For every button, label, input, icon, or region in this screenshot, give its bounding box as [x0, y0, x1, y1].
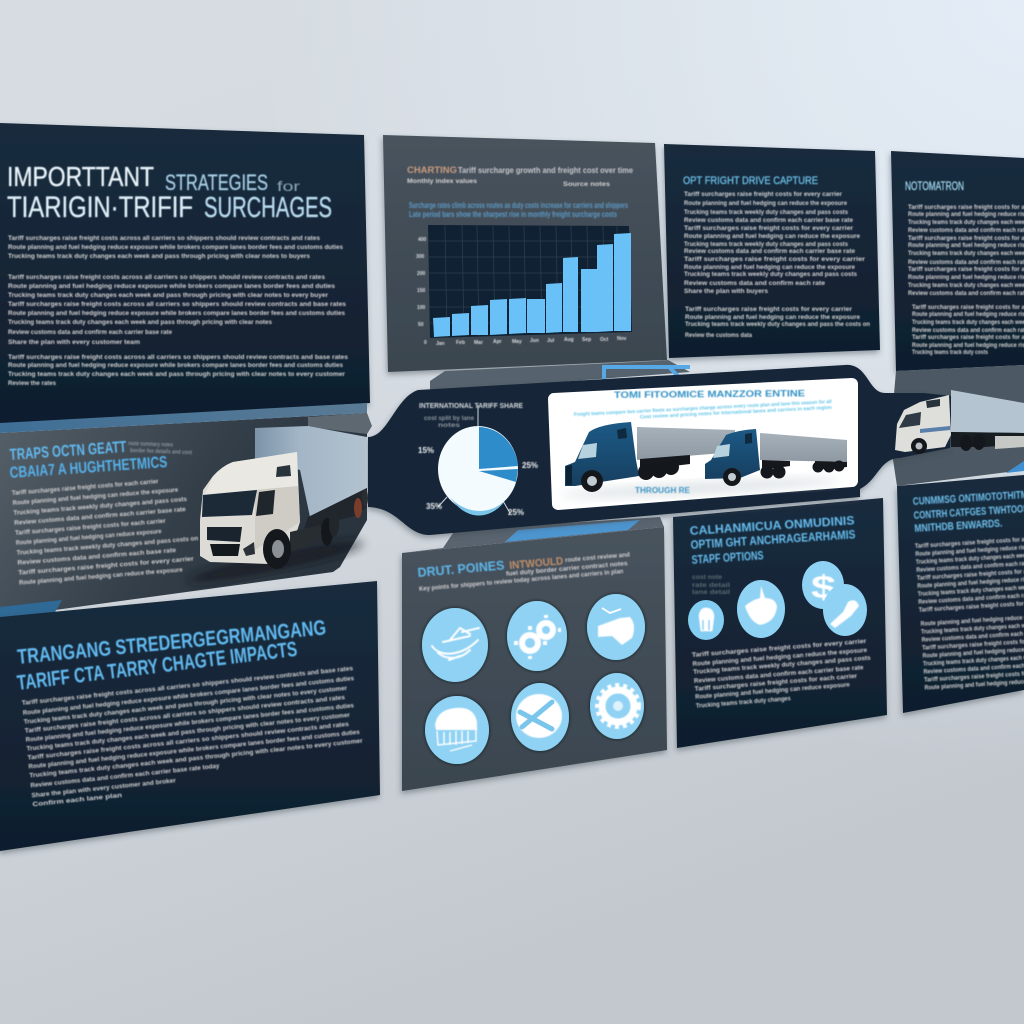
icon card heading: Key points for shippers to review today across lanes and carriers in plan [419, 568, 624, 593]
strip body text: Route planning and fuel hedging can reduce the exposure [12, 487, 179, 507]
strip body text: Review customs data and confirm each base rate [17, 547, 177, 567]
strategies body text: Trucking teams track duty changes each week and pass through pricing with clear notes to every customer [29, 738, 363, 780]
card heading [689, 513, 857, 567]
chart heading text: Surcharge rates climb across routes as duty costs increase for carriers and shippers [409, 201, 628, 210]
card heading [912, 489, 1024, 535]
trailer [255, 426, 367, 517]
panel: top right text card [891, 151, 1024, 371]
text block: overview paragraphs [8, 235, 348, 387]
strip heading: TRAPS OCTN GEATT [9, 439, 127, 464]
icon: container dome [425, 696, 489, 764]
card body text: Route planning and fuel hedging can reduce the exposure [684, 264, 855, 271]
gray connector strips [402, 360, 1024, 553]
rear wheels [321, 489, 368, 546]
pie labels: 35% [426, 502, 442, 511]
card body text: Route planning and fuel hedging can reduce exposure [695, 681, 850, 701]
card body text: Review customs data and confirm each carrier base rate [694, 664, 864, 685]
windshield [202, 490, 257, 517]
card body text: Trucking teams track weekly duty changes and pass costs [684, 271, 857, 278]
icon: handshake [587, 594, 645, 660]
front wheel [263, 529, 291, 569]
trailer side plate [995, 436, 1024, 449]
heading: important strategies: TIARIGIN·TRIFIF [7, 191, 193, 224]
strip body text: Review customs data and confirm each carrier base rate [14, 506, 186, 527]
strategies heading: TARIFF CTA TARRY CHAGTE IMPACTS [16, 638, 299, 695]
central connector band [368, 365, 952, 535]
small note [692, 575, 730, 596]
strategies body text [21, 665, 367, 808]
sleeper window [276, 465, 291, 477]
strategies body text: Tariff surcharges raise freight costs across all carriers so shippers should review contracts and rates [24, 694, 346, 735]
cab side [255, 486, 300, 550]
card body text: Review the customs data [685, 332, 752, 339]
bar chart: Nov [617, 336, 627, 342]
icon card heading: DRUT. POINES [417, 557, 505, 580]
right trailer chassis [951, 432, 1024, 447]
card body text: Review customs data and confirm each rate [684, 280, 825, 287]
bumper grille [210, 544, 240, 556]
strategies body text: Confirm each lane plan [32, 792, 122, 808]
pie leader lines [438, 405, 510, 513]
heading: important strategies: for [277, 178, 300, 194]
icon: crossing tools [511, 683, 569, 751]
blue accent on lower strip [505, 520, 640, 542]
bar chart: May [512, 339, 522, 345]
text block: overview paragraphs: Review the rates [8, 380, 56, 387]
icon: large gear [590, 673, 644, 739]
pie labels: 25% [508, 508, 524, 517]
bar chart: 0 [424, 340, 427, 346]
bar chart: 300 [416, 254, 425, 260]
card body text [684, 191, 870, 339]
strip body text [12, 475, 201, 587]
card body text: Route planning and fuel hedging can reduce the exposure [684, 233, 860, 240]
chassis [290, 525, 322, 552]
heading: important strategies [7, 161, 332, 224]
chart heading text: Monthly index values [407, 178, 477, 185]
card body text: Route planning and fuel hedging can reduce the exposure [685, 314, 860, 321]
headlight [243, 542, 255, 556]
text block: overview paragraphs: Share the plan with every customer team [8, 339, 140, 346]
right blue stripe [920, 426, 950, 433]
bar chart: Apr [493, 339, 502, 345]
card body text [692, 638, 874, 710]
card heading: NOTOMATRON [905, 179, 964, 193]
chart heading text: Late period bars show the sharpest rise in monthly freight surcharge costs [409, 210, 617, 219]
icon: hand [737, 580, 785, 638]
bar chart: Jul [547, 338, 555, 344]
chart heading text: Tariff surcharge growth and freight cost over time [458, 166, 634, 175]
bar chart: Jan [436, 341, 445, 347]
icon: dollar [802, 561, 844, 609]
small note: rate detail [692, 583, 730, 589]
icon card heading: route cost review and [565, 551, 630, 564]
icon card heading: INTWOULD [509, 555, 564, 572]
strip body text: Trucking teams track weekly duty changes and pass costs on [16, 535, 198, 557]
panel: icon grid card [402, 527, 667, 791]
panel: bottom right text card [897, 475, 1024, 713]
right cab [895, 395, 951, 452]
strategies body text: Trucking teams track duty changes each week and pass through pricing with clear notes to every customer [26, 712, 351, 753]
roof fairing [205, 452, 298, 494]
strip heading: CBAIA7 A HUGHTHETMICS [9, 454, 168, 482]
strip body text: Trucking teams track weekly duty changes and pass costs [13, 496, 188, 517]
heading: important strategies: STRATEGIES [165, 170, 268, 195]
strip heading: route summary notes [128, 441, 174, 449]
icon: warehouse cup [688, 600, 724, 640]
icon: dollar: $ [811, 569, 836, 605]
card body text: Tariff surcharges raise freight costs for every carrier [692, 638, 867, 659]
first blue truck [565, 422, 735, 492]
card body text: Tariff surcharges raise freight costs for each carrier [694, 673, 858, 693]
illustration: two blue trucks [560, 422, 847, 501]
card heading: STAPF OPTIONS [691, 548, 764, 567]
pie chart [438, 426, 518, 516]
card body text: Route planning and fuel hedging can reduce the exposure [684, 200, 847, 207]
card body text: Route planning and fuel hedging can reduce the exposure [692, 647, 868, 668]
bar chart: Aug [564, 337, 574, 343]
card body text: Trucking teams track weekly duty changes and pass costs [684, 209, 848, 216]
card sub text: Freight teams compare two carrier fleets as surcharges change across every route plan and lane this season for all [574, 399, 832, 418]
bar chart: 50 [418, 322, 424, 328]
strategies body text: Share the plan with every customer and broker [31, 777, 177, 799]
pie title: notes [438, 423, 461, 429]
truck shadow [560, 475, 840, 501]
card sub text: Cost review and pricing notes for international lanes and carriers in each region [640, 405, 832, 420]
card body text: Tariff surcharges raise freight costs for every carrier [684, 191, 842, 198]
text block: overview paragraphs: Trucking teams track duty changes each week and pass through pricing with clear notes [8, 319, 272, 326]
text block: overview paragraphs: Trucking teams track duty changes each week and pass through pricing with clear notes to every buyer [8, 292, 328, 299]
chart heading text: Source notes [563, 181, 610, 188]
card body text: Trucking teams track weekly duty changes and pass costs [684, 241, 848, 248]
card heading: OPT FRIGHT DRIVE CAPTURE [683, 175, 818, 187]
card body text: Trucking teams track weekly duty changes and pass the costs on [685, 321, 870, 328]
card body text: Share the plan with buyers [684, 288, 768, 295]
strategies body text: Route planning and fuel hedging reduce exposure while brokers compare lanes border fees and customs duties [25, 702, 355, 744]
card body text [908, 204, 1024, 356]
strip body text: Tariff surcharges raise freight costs for every carrier [18, 556, 195, 577]
pie labels: 25% [522, 461, 538, 470]
bar chart: Feb [456, 340, 465, 346]
blue accent on right strip [1006, 461, 1024, 473]
pie title [419, 403, 523, 429]
card body text: Tariff surcharges raise freight costs for every carrier [684, 256, 866, 263]
strip body text: Tariff surcharges raise freight costs for each carrier [12, 478, 159, 497]
right side window [926, 399, 940, 408]
heading: important strategies: SURCHAGES [204, 192, 332, 224]
bar chart: Sep [582, 337, 591, 343]
panel: bar chart card [383, 135, 667, 372]
cab body [200, 452, 300, 564]
road shadow [185, 535, 365, 589]
right trailer [951, 390, 1024, 433]
card caption: THROUGH RE [635, 486, 691, 495]
panel: main title and overview [0, 123, 370, 424]
text block: overview paragraphs: Trucking teams track duty changes each week and pass through pricing with clear notes to buyers [8, 253, 310, 260]
chart heading text [407, 165, 634, 219]
strip heading: border fee details and cost [130, 448, 192, 456]
illustration: right white truck [895, 390, 1024, 454]
text block: overview paragraphs: Trucking teams track duty changes each week and pass through pricing with clear notes to every customer [8, 371, 345, 378]
card body text [915, 536, 1024, 692]
strategies body text: Route planning and fuel hedging reduce exposure while brokers compare lanes border fees and customs duties [28, 729, 360, 771]
strategies body text: Trucking teams track duty changes each week and pass through pricing with clear notes to every customer [23, 685, 348, 726]
text block: overview paragraphs: Route planning and fuel hedging reduce exposure while brokers compare lanes border fees and duties [8, 283, 335, 290]
white truck card [554, 384, 852, 504]
strip heading [9, 439, 192, 482]
bar chart [416, 225, 632, 347]
icon: ship [422, 608, 488, 682]
strategies body text: Tariff surcharges raise freight costs across all carriers so shippers should review contracts and rates [27, 721, 350, 762]
panel: bottom left strategies [0, 581, 380, 851]
icon: arm [823, 584, 867, 636]
heading: important strategies: IMPORTTANT [7, 161, 154, 192]
strategies body text: Route planning and fuel hedging reduce exposure while brokers compare lanes border fees and customs duties [23, 675, 355, 717]
strip body text: Route planning and fuel hedging can reduce exposure [16, 528, 162, 547]
small note: lane detail [692, 590, 730, 596]
pie labels: 15% [418, 446, 434, 455]
card body text: Trucking teams track duty costs [912, 349, 988, 356]
pie title: cost split by lane [424, 416, 475, 422]
illustration: left white truck [185, 426, 368, 589]
trailer underside [300, 488, 367, 540]
bar chart: Mar [474, 340, 483, 346]
text block: overview paragraphs: Tariff surcharges raise freight costs across all carriers so shippers should review contracts and base rates [8, 301, 346, 308]
bar chart: 100 [417, 305, 426, 311]
strip body text: Route planning and fuel hedging can reduce the exposure [19, 567, 183, 587]
pie labels [418, 446, 538, 517]
text block: overview paragraphs: Tariff surcharges raise freight costs across all carriers so shippers should review contracts and rates [8, 235, 320, 242]
right windshield [899, 412, 921, 428]
card body text: Tariff surcharges raise freight costs for every carrier [685, 306, 852, 313]
card heading: CALHANMICUA ONMUDINIS [689, 513, 855, 538]
card body text: Trucking teams track weekly duty changes and pass costs [693, 655, 871, 676]
door window [256, 490, 275, 516]
small note: cost note [692, 575, 723, 581]
strategies heading: TRANGANG STREDERGEGRMANGANG [16, 616, 327, 669]
strip body text: Tariff surcharges raise freight costs for each carrier [15, 518, 166, 537]
bar chart: Jun [530, 338, 539, 344]
pie title: INTERNATIONAL TARIFF SHARE [419, 403, 523, 410]
icon card heading [417, 546, 632, 593]
card body text: Review customs data and confirm each carrier base rate [684, 217, 853, 224]
grille [207, 527, 242, 542]
blue bottom corner [0, 600, 62, 618]
bar chart: 150 [417, 288, 426, 294]
chart heading text: CHARTING [407, 165, 457, 175]
card body text: Review customs data and confirm each carrier base rate [684, 248, 855, 255]
right wheels [911, 434, 985, 454]
second blue truck [705, 429, 847, 486]
bar chart: 400 [418, 237, 427, 243]
pie chart block [418, 403, 538, 517]
strategies body text: Tariff surcharges raise freight costs across all carriers so shippers should review contracts and base rates [21, 665, 354, 707]
icon card heading: fuel duty border carrier contract notes [506, 560, 628, 578]
text block: overview paragraphs: Route planning and fuel hedging reduce exposure while brokers compare lanes border fees and customs duties [8, 244, 343, 251]
text block: overview paragraphs: Route planning and fuel hedging reduce exposure while brokers compare lanes border fees and customs duties [8, 362, 343, 369]
panel: icons and text card [673, 498, 887, 748]
text block: overview paragraphs: Route planning and fuel hedging reduce exposure while brokers compare lanes border fees and customs duties [8, 310, 345, 317]
card heading: OPTIM GHT ANCHRAGEARHAMIS [690, 527, 856, 552]
card heading: TOMI FITOOMICE MANZZOR ENTINE [614, 388, 805, 400]
icon: gears [507, 601, 567, 671]
card body text: Tariff surcharges raise freight costs for every carrier [684, 225, 853, 232]
text block: overview paragraphs: Tariff surcharges raise freight costs across all carriers so shippers should review contracts and rates [8, 274, 325, 281]
bar chart: 200 [417, 271, 426, 277]
panel: left truck strip [0, 403, 372, 618]
strategies body text: Review customs data and confirm each carrier base rate today [30, 763, 220, 790]
text block: overview paragraphs: Review customs data and confirm each carrier base rate [8, 329, 172, 336]
blue bracket connector [604, 366, 690, 384]
blue top strip [0, 403, 367, 433]
bar chart: Oct [600, 337, 609, 343]
text block: overview paragraphs: Tariff surcharges raise freight costs across all carriers so shippers should review contracts and base rates [8, 354, 348, 361]
panel: top middle text card [664, 144, 880, 358]
gray shoulder behind trailer [308, 413, 372, 434]
card body text: Trucking teams track duty changes [696, 695, 791, 710]
